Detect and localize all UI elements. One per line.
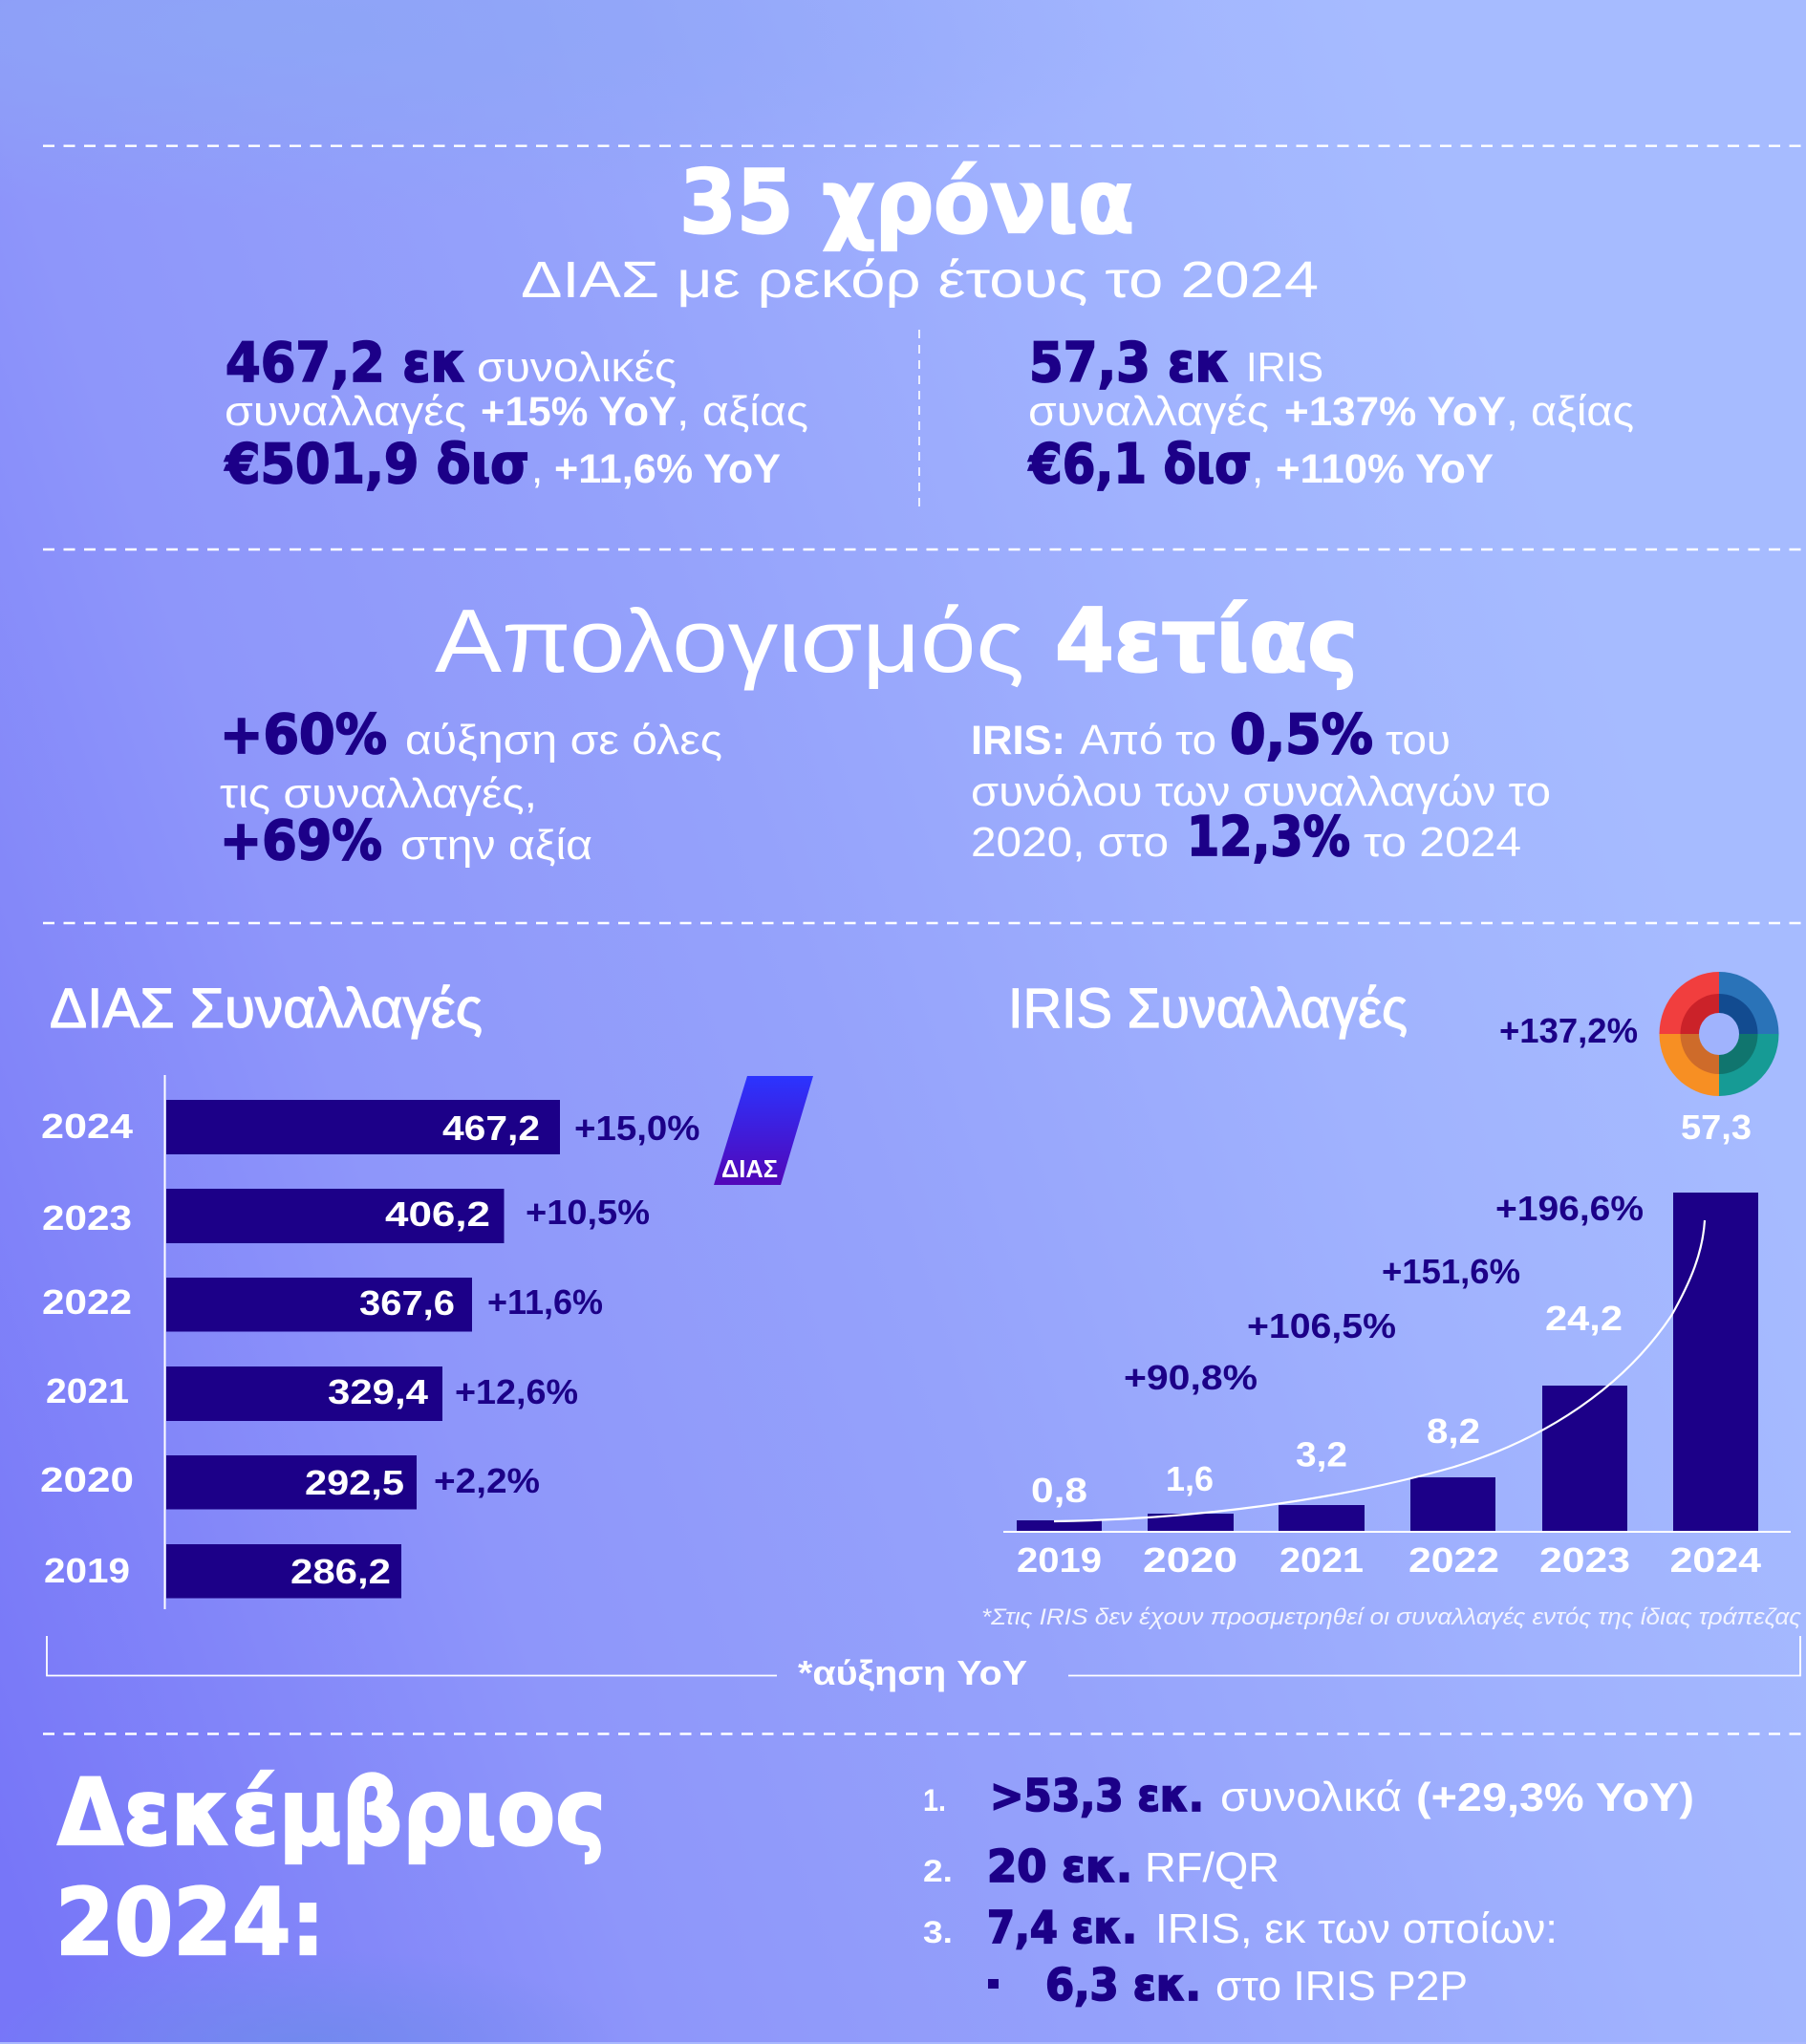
item 1: 1.	[923, 1783, 946, 1818]
bar: 2023	[42, 1189, 650, 1243]
heading: Απολογισμός 4ετίας: 4ετίας	[1055, 590, 1358, 692]
chart: ΔΙΑΣ horizontal bar chart	[40, 1075, 699, 1609]
bar: 2023: +196,6%	[1495, 1189, 1644, 1228]
item 2	[923, 1840, 1279, 1892]
bar: 2019: 2019	[44, 1551, 130, 1590]
bar: 2020: +90,8%	[1124, 1358, 1258, 1397]
panel: ΔΙΑΣ record totals: συναλλαγές	[225, 388, 466, 435]
item 3: 7,4 εκ.	[987, 1902, 1137, 1953]
panel: ΔΙΑΣ record totals: συνολικές	[477, 344, 677, 391]
heading: IRIS Συναλλαγές: IRIS Συναλλαγές	[1008, 978, 1408, 1040]
icon: ΔΙΑΣ logo: ΔΙΑΣ	[721, 1154, 778, 1183]
heading: ΔΙΑΣ Συναλλαγές: ΔΙΑΣ Συναλλαγές	[50, 978, 483, 1040]
heading: Δεκέμβριος 2024	[55, 1759, 606, 1976]
sub-item: 6,3 εκ.	[1045, 1959, 1201, 2011]
panel: IRIS record totals: IRIS	[1246, 344, 1323, 391]
panel: ΔΙΑΣ record totals: +11,6% YoY	[554, 446, 781, 492]
panel: ΔΙΑΣ record totals: 467,2 εκ	[226, 332, 466, 395]
bar: 2023: 406,2	[385, 1194, 490, 1234]
panel: ΔΙΑΣ record totals	[224, 332, 808, 496]
text block: total growth: +69%	[220, 809, 382, 872]
item 1: >53,3 εκ.	[990, 1770, 1204, 1821]
bar: 2019: 0,8	[1031, 1471, 1087, 1510]
panel: ΔΙΑΣ record totals: , αξίας	[677, 388, 808, 435]
panel: IRIS record totals	[1027, 332, 1634, 496]
bar: 2022	[42, 1278, 603, 1332]
sub-item: στο IRIS P2P	[1215, 1963, 1468, 2010]
bar: 2024: 2024	[41, 1107, 133, 1146]
panel: ΔΙΑΣ record totals: ,	[531, 445, 543, 492]
panel: IRIS record totals: +110% YoY	[1276, 446, 1494, 492]
bar: 2020	[1124, 1358, 1258, 1580]
icon: ΔΙΑΣ logo	[714, 1076, 813, 1185]
item 1: συνολικά	[1220, 1774, 1402, 1820]
item 1	[923, 1770, 1694, 1821]
item 3: 3.	[923, 1915, 953, 1949]
heading: Απολογισμός 4ετίας: Απολογισμός	[435, 591, 1024, 691]
text block: total growth: τις συναλλαγές,	[220, 770, 537, 817]
bar: 2023: 24,2	[1545, 1299, 1623, 1338]
bar: 2023: +10,5%	[526, 1193, 650, 1232]
panel: ΔΙΑΣ record totals: +15% YoY	[481, 389, 677, 435]
bar: 2024	[1670, 1108, 1761, 1580]
chart: IRIS vertical bar chart	[1003, 1108, 1791, 1580]
sub-item	[988, 1959, 1468, 2011]
panel: IRIS record totals: +137% YoY	[1284, 389, 1506, 435]
bar: 2019	[44, 1544, 401, 1598]
panel: IRIS record totals: , αξίας	[1506, 388, 1634, 435]
panel: ΔΙΑΣ record totals: €501,9 δισ	[224, 433, 529, 496]
bar: 2024	[41, 1100, 699, 1154]
list: December figures	[923, 1770, 1694, 2011]
bracket: αύξηση YoY legend: *αύξηση YoY	[798, 1653, 1027, 1692]
panel: IRIS record totals: ,	[1252, 445, 1263, 492]
text block: total growth: αύξηση σε όλες	[405, 717, 722, 764]
text block: IRIS share: IRIS:	[971, 718, 1065, 764]
bar: 2019: 2019	[1017, 1540, 1102, 1580]
bar: 2020: 2020	[1143, 1540, 1237, 1580]
icon: IRIS logo	[1659, 972, 1779, 1096]
bar: 2022: 2022	[1408, 1540, 1499, 1580]
title: 35 χρόνια: 35 χρόνια	[679, 151, 1134, 253]
bar: 2022: +11,6%	[487, 1282, 603, 1322]
text block: IRIS share: το 2024	[1364, 819, 1521, 866]
text block: IRIS share: 2020, στο	[971, 819, 1169, 866]
text block: total growth: στην αξία	[400, 822, 592, 869]
item 1: (+29,3% YoY)	[1416, 1775, 1694, 1819]
bar: 2023: 2023	[1539, 1540, 1630, 1580]
panel: IRIS record totals: €6,1 δισ	[1027, 433, 1252, 496]
panel: IRIS record totals: 57,3 εκ	[1029, 332, 1230, 395]
item 2: RF/QR	[1145, 1844, 1279, 1891]
text block: IRIS share: συνόλου των συναλλαγών το	[971, 768, 1551, 815]
bar: 2024: 57,3	[1681, 1108, 1752, 1147]
bar: 2024: 2024	[1670, 1540, 1761, 1580]
text block: total growth: +60%	[220, 703, 387, 766]
subtitle: ΔΙΑΣ με ρεκόρ έτους το 2024	[521, 251, 1319, 309]
item 2: 2.	[923, 1854, 953, 1888]
heading: Απολογισμός 4ετίας	[435, 590, 1358, 692]
bar: 2021: 3,2	[1296, 1435, 1347, 1474]
bar: 2023	[1495, 1189, 1644, 1580]
item 2: 20 εκ.	[987, 1840, 1132, 1892]
bar: 2021: 2021	[46, 1371, 129, 1410]
bar: 2021: 329,4	[328, 1372, 428, 1411]
bar: 2020: 1,6	[1166, 1459, 1214, 1498]
bar: 2021	[46, 1366, 578, 1421]
bar: 2022: 2022	[42, 1282, 132, 1322]
bar: 2021: 2021	[1279, 1540, 1364, 1580]
bar: 2021: +106,5%	[1247, 1306, 1396, 1345]
bar: 2019: 286,2	[290, 1552, 391, 1591]
text block: IRIS share: 0,5%	[1230, 703, 1373, 766]
bar: 2023: 2023	[42, 1198, 132, 1237]
item 3	[923, 1902, 1558, 1953]
bar: 2024: 467,2	[442, 1108, 540, 1148]
text block: IRIS share	[971, 703, 1551, 869]
text block: IRIS share: του	[1386, 717, 1451, 764]
text block: IRIS share: 12,3%	[1187, 806, 1350, 869]
text block: total growth	[220, 703, 722, 872]
bracket: αύξηση YoY legend	[47, 1636, 1800, 1692]
text block: IRIS share: Από το	[1080, 717, 1216, 764]
bar: 2021	[1247, 1306, 1396, 1580]
bar: 2020	[40, 1455, 540, 1510]
panel: IRIS record totals: συναλλαγές	[1028, 388, 1269, 435]
footnote: *Στις IRIS δεν έχουν προσμετρηθεί οι συναλλαγές εντός της ίδιας τράπεζας	[981, 1604, 1801, 1630]
bar: 2020: 2020	[40, 1460, 134, 1499]
bar: 2022: 367,6	[359, 1283, 455, 1323]
bar: 2024: +15,0%	[574, 1108, 699, 1148]
trend curve	[1054, 1220, 1705, 1521]
item 3: IRIS, εκ των οποίων:	[1155, 1905, 1558, 1952]
bar: 2021: +12,6%	[455, 1372, 578, 1411]
bar: 2020: +2,2%	[434, 1461, 540, 1500]
heading: Δεκέμβριος 2024: 2024:	[55, 1869, 325, 1976]
bar: 2022: +151,6%	[1382, 1252, 1520, 1291]
callout: +137,2%: +137,2%	[1499, 1011, 1638, 1050]
bar: 2019	[1017, 1471, 1102, 1580]
bar: 2022: 8,2	[1427, 1411, 1480, 1451]
bar: 2020: 292,5	[305, 1463, 404, 1502]
heading: Δεκέμβριος 2024: Δεκέμβριος	[57, 1759, 606, 1866]
bar: 2022	[1382, 1252, 1520, 1580]
